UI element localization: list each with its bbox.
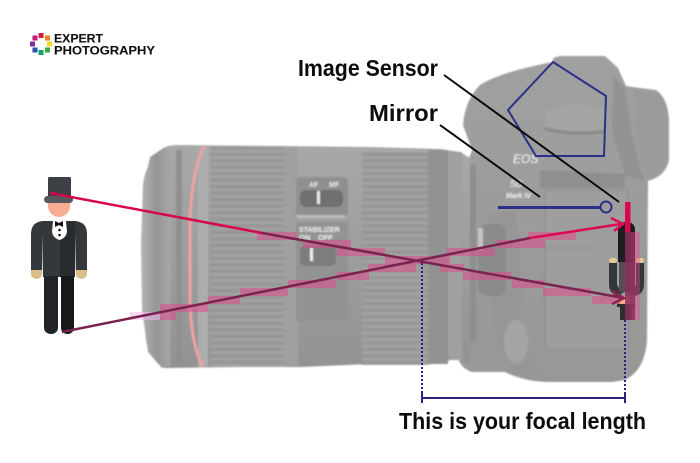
grip texture xyxy=(488,210,545,378)
shirt front xyxy=(52,221,67,240)
pointer line: Image Sensor xyxy=(444,75,619,202)
pointer line: Mirror xyxy=(440,125,540,197)
inverted hands xyxy=(609,258,617,263)
hot shoe dial xyxy=(545,104,604,131)
body labels: EOS xyxy=(513,152,538,166)
face xyxy=(48,203,70,217)
logo wordmark: EXPERT xyxy=(54,32,104,46)
lens barrel: ON xyxy=(299,233,310,242)
camera photo: faded grey body and lens xyxy=(141,56,669,382)
ray: top of subject to bottom of sensor xyxy=(50,193,624,304)
inverted head xyxy=(620,296,634,304)
hands xyxy=(31,270,42,279)
red ring xyxy=(190,146,204,367)
ray: bottom of subject to top of sensor xyxy=(62,218,623,332)
bow tie xyxy=(55,221,63,227)
inverted arms xyxy=(609,263,624,296)
lens barrel xyxy=(141,145,470,368)
compression colour blocks along the rays xyxy=(130,232,624,320)
logo: Expert Photography xyxy=(30,32,155,58)
lens barrel: MF xyxy=(329,182,340,189)
legs xyxy=(44,276,58,334)
caption: focal length: This is your focal length xyxy=(399,408,646,434)
heading: Image Sensor: Image Sensor xyxy=(298,55,438,81)
lens barrel: OFF xyxy=(318,233,333,242)
stabilizer switch: STABILIZER xyxy=(299,227,340,234)
inverted legs and torso xyxy=(618,222,635,262)
focal length dimension bracket xyxy=(422,263,625,403)
zoom ring xyxy=(210,147,286,367)
inverted figure on the sensor xyxy=(609,222,644,320)
figure: man in top hat xyxy=(31,177,87,334)
inverted hat xyxy=(617,304,635,320)
switch panel xyxy=(296,177,348,217)
camera body xyxy=(430,56,669,382)
focus ring xyxy=(362,152,428,365)
heading: Mirror: Mirror xyxy=(369,100,438,126)
sensor bar xyxy=(625,202,635,320)
camera body: 5D xyxy=(510,179,523,190)
AF MF switch: AF xyxy=(309,182,319,189)
pink overlay xyxy=(630,232,640,320)
icon: colour ring xyxy=(30,33,52,55)
mirror marker xyxy=(498,202,612,212)
camera body: Mark IV xyxy=(506,193,532,200)
tuxedo arms and torso xyxy=(31,221,87,277)
top hat xyxy=(44,177,73,203)
viewfinder pentaprism outline xyxy=(508,62,606,156)
inverted torso xyxy=(619,262,635,292)
logo: Expert Photography: PHOTOGRAPHY xyxy=(54,44,155,58)
